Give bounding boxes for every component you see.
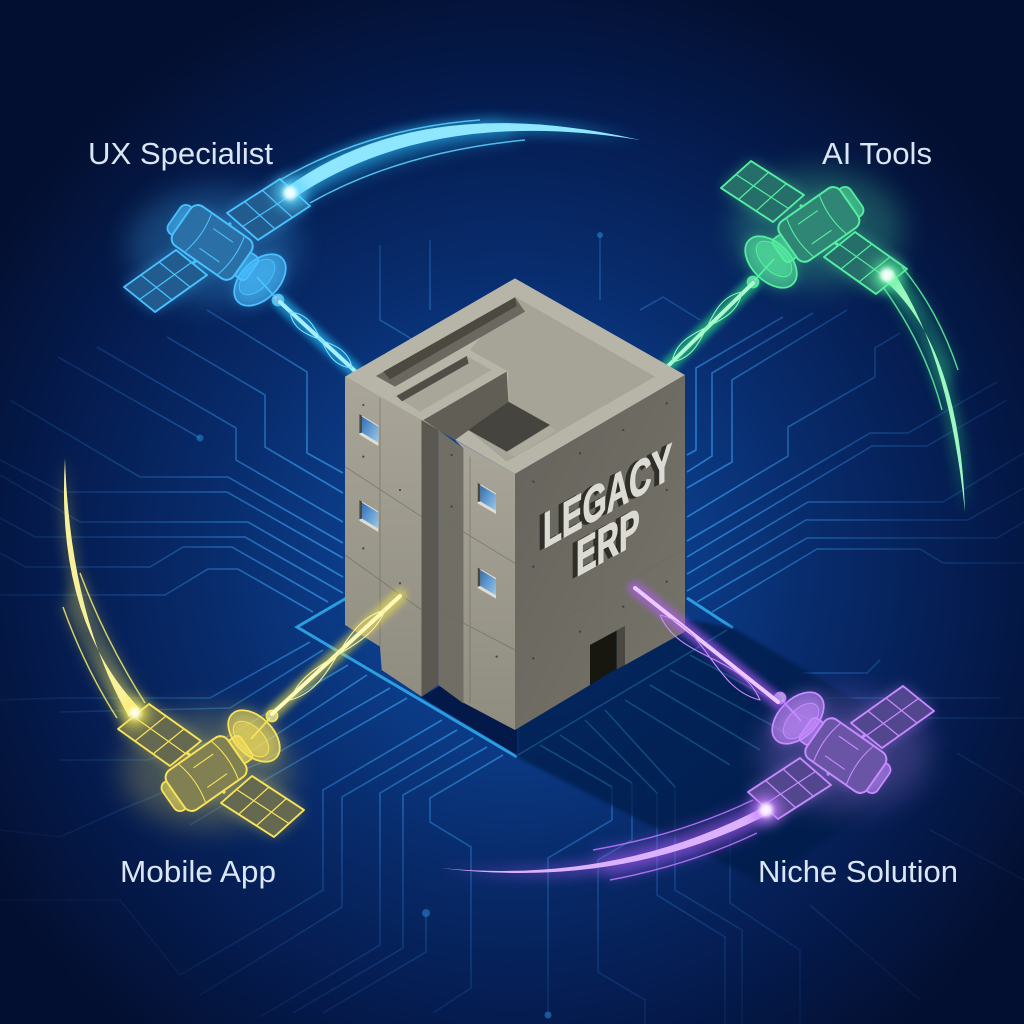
satellite: mobile app	[118, 701, 304, 837]
satellite: niche solution	[748, 683, 934, 819]
recessed wall	[422, 420, 438, 697]
building: Legacy ERP	[345, 278, 685, 730]
roof	[345, 278, 685, 474]
arc: niche solution	[440, 796, 780, 880]
building shadow	[421, 620, 955, 882]
circuit board pattern	[0, 235, 1024, 1024]
label: AI Tools: AI Tools	[822, 136, 932, 171]
arc: AI tools	[873, 261, 965, 512]
tie holes	[362, 402, 668, 659]
building sign: LEGACY ERP: ERP	[576, 498, 640, 589]
front pier face	[455, 440, 515, 730]
label: UX Specialist: UX Specialist	[88, 136, 273, 171]
satellite: UX specialist	[124, 179, 310, 315]
arc: UX specialist	[275, 118, 640, 208]
building sign: LEGACY ERP: LEGACY	[543, 433, 672, 561]
building sign: LEGACY ERP: ERP	[571, 500, 635, 591]
label: Mobile App: Mobile App	[120, 854, 276, 889]
platform outline	[297, 596, 733, 757]
label: Niche Solution: Niche Solution	[758, 854, 958, 889]
door	[590, 631, 617, 685]
satellite: AI tools	[721, 161, 907, 297]
beam: mobile app	[272, 596, 400, 714]
beam: UX specialist	[280, 302, 356, 372]
building sign: LEGACY ERP: LEGACY	[538, 435, 667, 563]
windows	[359, 414, 496, 599]
panel joints	[345, 398, 685, 703]
beam: AI tools	[668, 283, 753, 366]
arc: mobile app	[63, 458, 148, 726]
right face	[515, 375, 685, 730]
beam: niche solution	[635, 588, 778, 702]
left wing face	[345, 377, 422, 697]
shadow circuit traces	[518, 630, 810, 793]
circuit nodes	[196, 232, 603, 1018]
